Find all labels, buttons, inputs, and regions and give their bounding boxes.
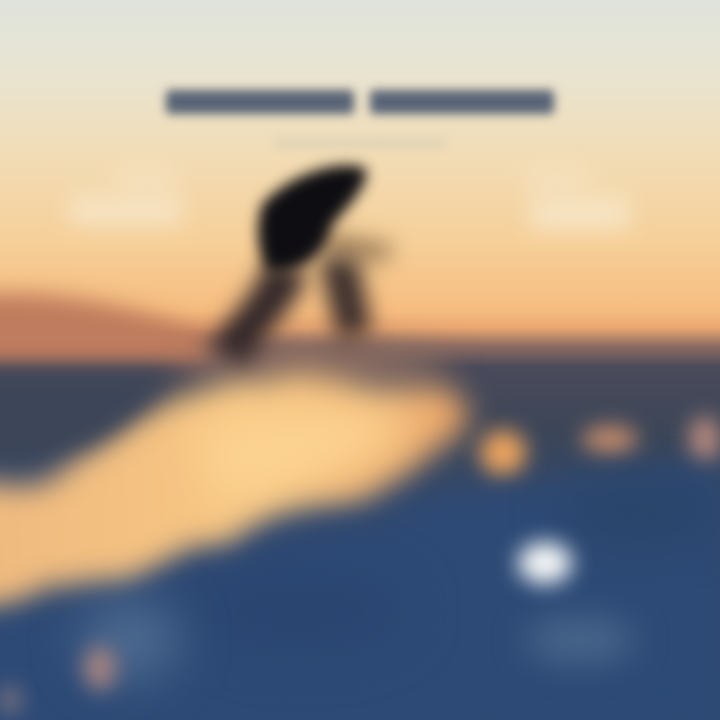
- dark wave patch: [190, 565, 410, 655]
- lower wave light patch: [80, 600, 180, 680]
- surfer silhouette: [208, 165, 392, 365]
- title placeholder: illegible blurred heading: [166, 90, 554, 114]
- surfer front leg: [320, 258, 371, 340]
- brown haze above wave: [190, 347, 450, 383]
- surfer torso: [258, 165, 366, 272]
- glowing wave body: [0, 383, 464, 610]
- left caption placeholder: illegible blurred text: [70, 170, 182, 225]
- dark wave patch right: [560, 480, 720, 540]
- white foam spot: [518, 542, 572, 584]
- lower right light patch: [525, 616, 635, 664]
- orange highlight right: [582, 426, 638, 454]
- bright wave core: [199, 401, 420, 505]
- dark water left over wave: [0, 372, 175, 451]
- orange highlight far right: [689, 416, 720, 464]
- blue wave crest shade: [0, 468, 720, 720]
- subtitle placeholder: illegible blurred line: [275, 138, 445, 148]
- right caption placeholder: illegible blurred text: [525, 170, 630, 230]
- distant hill: [0, 294, 215, 362]
- warm reflection lower left: [84, 646, 116, 690]
- surfer rear leg: [208, 262, 308, 365]
- surfer arm: [325, 232, 392, 262]
- orange highlight centre: [480, 430, 526, 476]
- warm reflection bottom corner: [0, 686, 22, 714]
